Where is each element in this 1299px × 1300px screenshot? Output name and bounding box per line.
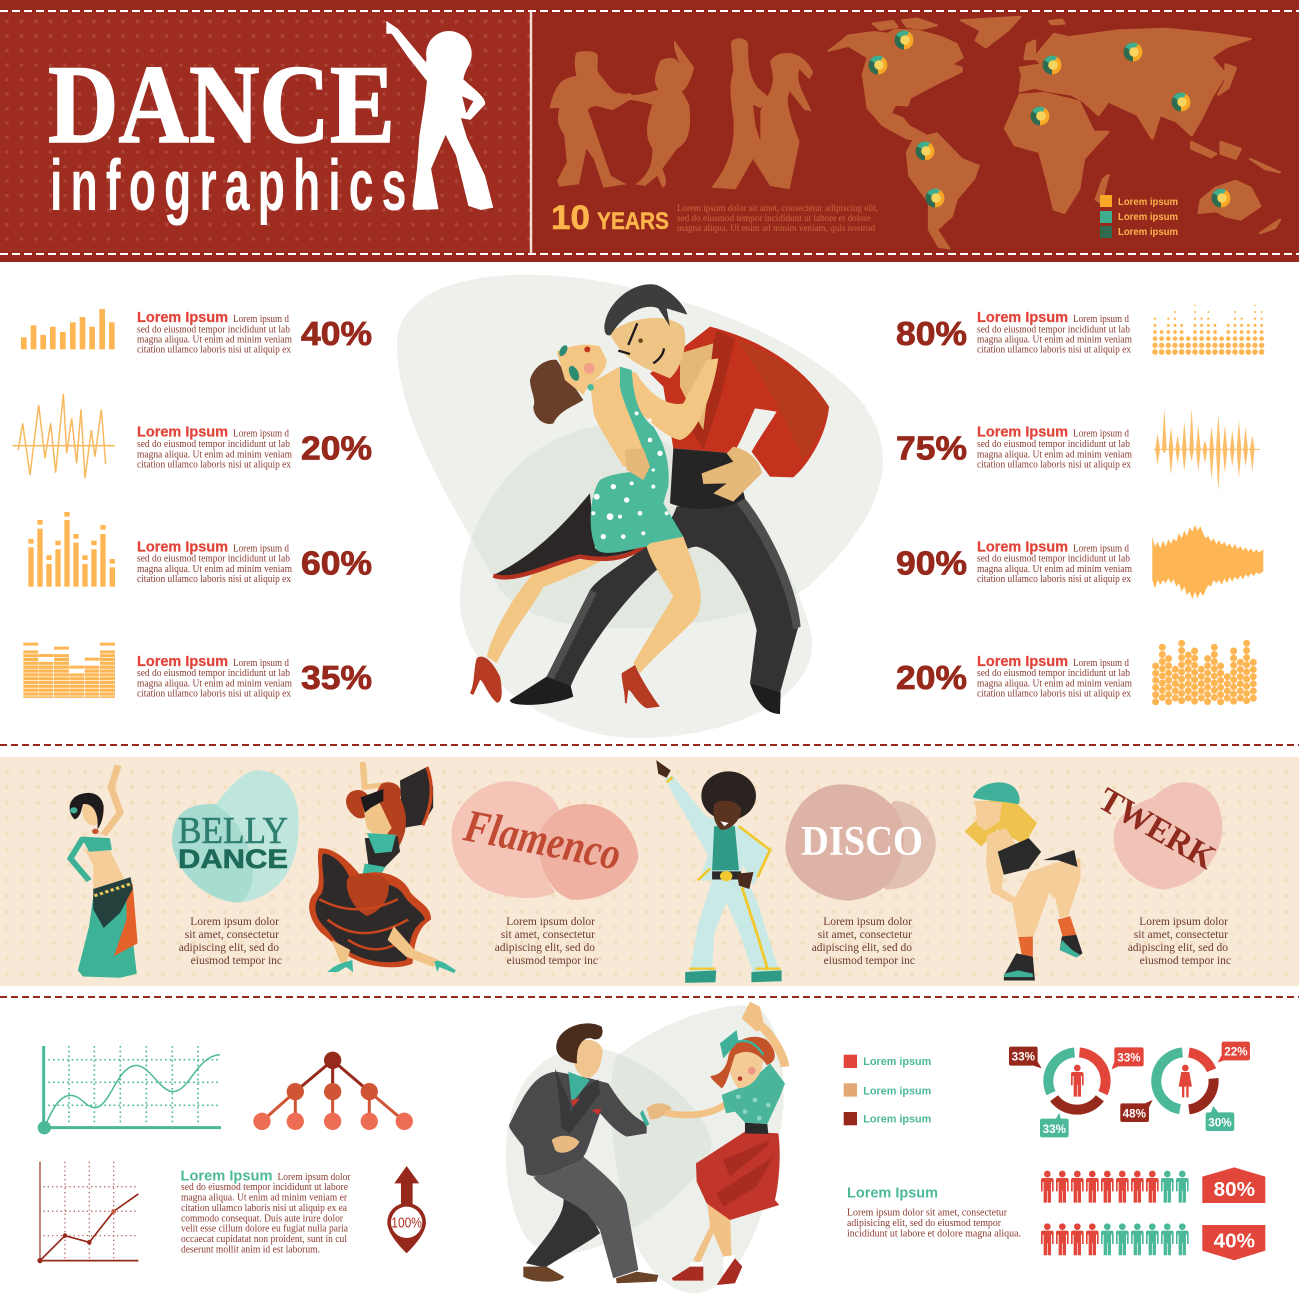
text block: lorem ipsum teal left: magna aliqua. Ut enim ad minim veniam er	[181, 1192, 348, 1204]
text: disco description: eiusmod tempor inc	[824, 955, 915, 967]
stat row 1 right: sed do eiusmod tempor incididunt ut lab	[977, 324, 1130, 335]
map legend: Lorem ipsum	[1118, 227, 1178, 238]
woman's legs	[693, 1197, 732, 1263]
top	[81, 836, 112, 852]
woman's shoes	[470, 657, 660, 708]
man's hands	[552, 1103, 672, 1153]
hands	[656, 760, 753, 889]
illustration: belly dancer	[70, 765, 138, 978]
text: flamenco description	[495, 916, 598, 967]
face	[713, 801, 741, 830]
map legend: Lorem ipsum	[1118, 197, 1178, 208]
text: disco description: adipiscing elit, sed do	[812, 942, 912, 954]
people chart: 80%	[1041, 1167, 1265, 1203]
stat row 4 left: 35%	[301, 659, 372, 696]
text: belly dance description: eiusmod tempor inc	[191, 955, 282, 967]
text block: lorem ipsum teal left: Lorem ipsum dolor	[278, 1172, 351, 1183]
stat row 3 left: citation ullamco laboris nisi ut aliquip ex	[137, 574, 291, 585]
man's hand on own side	[702, 447, 762, 502]
stat row 4 right: Lorem ipsum d	[1073, 658, 1129, 669]
10 years callout: Lorem ipsum dolor sit amet, consectetur adipiscing elit,	[677, 203, 878, 213]
flamenco blobs	[452, 781, 638, 900]
man's head	[610, 318, 685, 378]
chart: bars	[21, 309, 115, 349]
callout: 33% dark: 33%	[1012, 1050, 1036, 1063]
lowered arm	[70, 838, 89, 881]
badge: 80%	[1202, 1167, 1265, 1203]
stat row 4 left: Lorem ipsum d	[233, 658, 289, 669]
10 years callout: YEARS	[597, 208, 669, 235]
chart: dot equalizer	[1155, 305, 1262, 352]
text: twerk description	[1128, 916, 1231, 967]
stat row 1 left: Lorem Ipsum	[137, 310, 228, 326]
badge: 40%: 40%	[1214, 1229, 1255, 1252]
shorts	[1043, 850, 1078, 867]
boots	[1004, 935, 1083, 981]
text: twerk description: eiusmod tempor inc	[1140, 955, 1231, 967]
chart: spiky sound wave	[1154, 408, 1260, 492]
cap	[973, 782, 1020, 804]
afro	[701, 771, 756, 820]
stat row 3 right: Lorem ipsum d	[1073, 543, 1129, 554]
text block: lorem ipsum teal right: incididunt ut labore et dolore magna aliqua.	[847, 1228, 1021, 1240]
title	[48, 43, 415, 226]
people chart: 40%	[1041, 1223, 1265, 1260]
stat row 1 left	[137, 310, 372, 356]
stat row 3 right	[896, 539, 1132, 585]
stat row 1 right: citation ullamco laboris nisi ut aliquip ex	[977, 345, 1131, 356]
stat row 3 right: 90%	[896, 544, 967, 581]
woman's skirt back	[493, 493, 647, 577]
stat row 2 left: Lorem ipsum d	[233, 429, 289, 440]
donut chart: male	[1009, 1047, 1144, 1137]
jacket	[509, 1072, 647, 1176]
legend: bottom: Lorem ipsum	[863, 1085, 932, 1097]
head	[82, 797, 104, 825]
callout: 48% dark: 48%	[1123, 1108, 1147, 1121]
arms	[665, 1103, 727, 1115]
shoes	[327, 960, 456, 973]
stat row 3 left	[137, 539, 372, 585]
label: flamenco: Flamenco	[459, 799, 625, 880]
10 years callout: sed do eiusmod tempor incididunt ut labore et dolore	[677, 213, 871, 223]
belt	[712, 871, 741, 879]
chart: capped bars	[28, 512, 115, 587]
far leg	[526, 1197, 600, 1268]
text block: lorem ipsum teal left: Lorem Ipsum	[180, 1168, 272, 1184]
text: flamenco description: eiusmod tempor inc	[507, 955, 598, 967]
text: disco description	[812, 916, 915, 967]
text block: lorem ipsum teal left: sed do eiusmod tempor incididunt ut labore	[181, 1182, 349, 1193]
man's shoes	[510, 677, 781, 714]
stat row 2 right: citation ullamco laboris nisi ut aliquip ex	[977, 459, 1131, 470]
disco blobs	[785, 784, 936, 901]
stat row 2 left: sed do eiusmod tempor incididunt ut lab	[137, 439, 290, 450]
label: belly dance: BELLY	[178, 810, 288, 852]
text: belly dance description: sit amet, consectetur	[185, 929, 279, 941]
blouse	[722, 1063, 785, 1124]
map data pins	[868, 30, 1230, 208]
illustration: latin dance couple	[470, 284, 829, 714]
dancer silhouettes	[550, 38, 813, 189]
stat row 2 right: magna aliqua. Ut enim ad minim veniam	[977, 449, 1132, 460]
text: disco description: sit amet, consectetur	[818, 929, 912, 941]
stat row 1 left: citation ullamco laboris nisi ut aliquip ex	[137, 345, 291, 356]
text block: lorem ipsum teal left	[180, 1168, 351, 1256]
chart: equalizer blocks	[23, 643, 115, 698]
callout: 30% teal: 30%	[1208, 1117, 1232, 1130]
hair	[965, 801, 1037, 847]
text: belly dance description	[179, 916, 282, 967]
header banner	[0, 0, 1299, 262]
text block: lorem ipsum teal right	[847, 1184, 1021, 1240]
woman's head	[729, 1048, 763, 1088]
near leg	[533, 1157, 638, 1278]
callout: 22% red: 22%	[1224, 1046, 1248, 1059]
stat row 2 left	[137, 425, 372, 470]
stat row 1 right: Lorem Ipsum	[977, 310, 1068, 326]
woman's shoes	[672, 1258, 742, 1285]
stat row 1 left: 40%	[301, 315, 372, 352]
badge: 40%	[1202, 1225, 1265, 1260]
raised arm	[363, 762, 390, 787]
man's sash	[670, 448, 745, 509]
jacket	[664, 775, 770, 886]
icon: white disco dancer silhouette	[386, 21, 493, 210]
woman's face	[557, 345, 607, 395]
section divider lines	[0, 745, 1299, 997]
stat row 4 right: magna aliqua. Ut enim ad minim veniam	[977, 678, 1132, 690]
stat row 4 right: 20%	[896, 659, 967, 696]
text: belly dance description: adipiscing elit, sed do	[179, 942, 279, 954]
skirt	[696, 1132, 780, 1220]
stat row 1 right	[896, 310, 1132, 356]
legend: bottom: Lorem ipsum	[863, 1056, 932, 1068]
icon: arrow with 100% pin	[387, 1166, 426, 1253]
text: flamenco description: sit amet, consectetur	[501, 929, 595, 941]
shirt and tie	[568, 1072, 590, 1103]
stat row 2 right: Lorem ipsum d	[1073, 429, 1129, 440]
callout: 33% teal: 33%	[1043, 1123, 1067, 1136]
stat row 4 right: Lorem Ipsum	[977, 654, 1068, 670]
stat row 4 left: magna aliqua. Ut enim ad minim veniam	[137, 678, 292, 690]
text: flamenco description: Lorem ipsum dolor	[506, 916, 595, 928]
stat row 2 right: 75%	[896, 430, 967, 467]
stat row 3 left: magna aliqua. Ut enim ad minim veniam	[137, 564, 292, 575]
belt	[745, 1123, 768, 1134]
woman's hair	[530, 360, 583, 424]
illustration: flamenco dancer	[309, 762, 456, 973]
map legend: Lorem ipsum	[1118, 212, 1178, 223]
stat row 3 right: Lorem Ipsum	[977, 539, 1068, 555]
chart: line wave	[13, 394, 115, 478]
stat row 3 left: 60%	[301, 544, 372, 581]
map legend	[1100, 195, 1178, 238]
belt	[93, 877, 133, 928]
heading: infographics: infographics	[50, 145, 415, 226]
stat row 2 left: Lorem Ipsum	[137, 425, 228, 441]
man's trousers	[547, 497, 798, 693]
stat row 4 right: citation ullamco laboris nisi ut aliquip ex	[977, 688, 1131, 700]
text block: lorem ipsum teal right: adipisicing elit, sed do eiusmod tempor	[847, 1218, 1002, 1229]
text block: lorem ipsum teal right: Lorem ipsum dolor sit amet, consectetur	[847, 1208, 1008, 1218]
woman's dress	[591, 367, 683, 553]
stat row 1 right: magna aliqua. Ut enim ad minim veniam	[977, 335, 1132, 346]
stat row 4 left: Lorem Ipsum	[137, 654, 228, 670]
shirt	[712, 826, 739, 870]
woman's front leg	[633, 509, 701, 673]
heading: DANCE: DANCE	[48, 43, 395, 167]
bottom couple background blobs	[506, 1006, 784, 1293]
label: twerk: TWERK	[1092, 781, 1222, 877]
text block: lorem ipsum teal left: occaecat cupidatat non proident, sunt in cul	[181, 1234, 347, 1245]
raised arm	[104, 765, 120, 835]
illustration: swing dance couple	[509, 1002, 785, 1285]
cuff	[640, 1110, 649, 1127]
stat row 1 right: Lorem ipsum d	[1073, 314, 1129, 325]
badge: 80%: 80%	[1214, 1178, 1255, 1201]
man's hand on the woman's waist	[625, 448, 650, 480]
callout: 33% red: 33%	[1117, 1051, 1141, 1064]
legs	[332, 926, 439, 967]
arms and torso	[986, 828, 1018, 903]
label: belly dance: DANCE	[178, 844, 288, 874]
icon: arrow with 100% pin: 100%	[391, 1215, 422, 1231]
text: disco description: Lorem ipsum dolor	[823, 916, 912, 928]
legend: bottom: Lorem ipsum	[863, 1114, 932, 1126]
chart: honeycomb equalizer	[1156, 643, 1253, 703]
label: belly dance	[178, 810, 288, 874]
text: twerk description: Lorem ipsum dolor	[1139, 916, 1228, 928]
text block: lorem ipsum teal left: commodo consequat. Duis aute irure dolor	[181, 1213, 344, 1224]
text block: lorem ipsum teal left: citation ullamco laboris nisi ut aliquip ex ea	[181, 1203, 348, 1214]
raised hand	[742, 1002, 765, 1032]
stat row 4 left: sed do eiusmod tempor incididunt ut lab	[137, 668, 290, 679]
stat row 4 right: sed do eiusmod tempor incididunt ut lab	[977, 668, 1130, 679]
stat row 2 right: sed do eiusmod tempor incididunt ut lab	[977, 439, 1130, 450]
chart: waveform	[1152, 525, 1263, 599]
icon: male figure	[1071, 1065, 1084, 1097]
text: twerk description: sit amet, consectetur	[1134, 929, 1228, 941]
fan	[400, 767, 433, 828]
central couple background blobs	[397, 275, 883, 738]
stat row 2 right: Lorem Ipsum	[977, 425, 1068, 441]
legend: bottom	[844, 1055, 932, 1126]
stat row 3 right: citation ullamco laboris nisi ut aliquip ex	[977, 574, 1131, 585]
stat row 2 left: magna aliqua. Ut enim ad minim veniam	[137, 449, 292, 460]
icon: female figure	[1179, 1065, 1192, 1097]
hair and head	[346, 782, 406, 849]
stat row 2 right	[896, 425, 1132, 470]
stat row 1 left: sed do eiusmod tempor incididunt ut lab	[137, 324, 290, 335]
text block: lorem ipsum teal right: Lorem Ipsum	[847, 1184, 938, 1202]
text: flamenco description: adipiscing elit, sed do	[495, 942, 595, 954]
chart: red line graph	[37, 1162, 138, 1263]
legs	[1012, 858, 1080, 938]
man's shoes	[523, 1267, 658, 1283]
chart: tree diagram	[253, 1052, 413, 1130]
stat row 1 left: magna aliqua. Ut enim ad minim veniam	[137, 335, 292, 346]
stat row 4 right	[896, 654, 1132, 700]
stat row 3 left: Lorem ipsum d	[233, 543, 289, 554]
text block: lorem ipsum teal left: velit esse cillum dolore eu fugiat nulla paria	[181, 1224, 349, 1235]
woman's torso and arm	[590, 358, 718, 467]
stat row 1 left: Lorem ipsum d	[233, 314, 289, 325]
stat row 3 left: Lorem Ipsum	[137, 539, 228, 555]
twerk blob	[1114, 782, 1222, 890]
shoes	[685, 970, 782, 983]
face	[975, 801, 1002, 831]
text block: lorem ipsum teal left: deserunt mollit anim id est laborum.	[181, 1244, 320, 1256]
donut chart: female	[1120, 1042, 1250, 1131]
man's head	[573, 1040, 603, 1078]
chart: teal line graph	[38, 1046, 221, 1134]
10 years callout: magna aliqua. Ut enim ad minim veniam, quis nostrud	[677, 223, 876, 233]
illustration: disco dancer	[656, 760, 782, 983]
socks	[690, 1255, 735, 1278]
label: disco: DISCO	[801, 819, 923, 865]
bodice	[365, 836, 400, 869]
stat row 3 right: magna aliqua. Ut enim ad minim veniam	[977, 564, 1132, 575]
man's shirt	[650, 327, 829, 477]
stat row 3 right: sed do eiusmod tempor incididunt ut lab	[977, 554, 1130, 565]
10 years callout	[551, 199, 878, 237]
illustration: twerk dancer	[965, 782, 1083, 981]
10 years callout: 10	[551, 199, 590, 237]
skirt	[309, 848, 431, 967]
torso	[85, 850, 124, 889]
world map	[829, 17, 1280, 248]
stat row 2 left: citation ullamco laboris nisi ut aliquip ex	[137, 459, 291, 470]
stat row 4 left	[137, 654, 372, 700]
panel: dance styles band	[0, 757, 1299, 986]
man's chest and neck	[680, 343, 713, 430]
skirt	[78, 886, 137, 978]
text: twerk description: adipiscing elit, sed do	[1128, 942, 1228, 954]
belly dance blob	[172, 770, 299, 903]
socks	[1018, 916, 1076, 958]
stat row 1 right: 80%	[896, 315, 967, 352]
stat row 3 left: sed do eiusmod tempor incididunt ut lab	[137, 554, 290, 565]
woman's back leg	[487, 559, 603, 663]
stat row 2 left: 20%	[301, 430, 372, 467]
stat row 4 left: citation ullamco laboris nisi ut aliquip ex	[137, 688, 291, 700]
pants	[689, 881, 780, 975]
text: belly dance description: Lorem ipsum dolor	[190, 916, 279, 928]
